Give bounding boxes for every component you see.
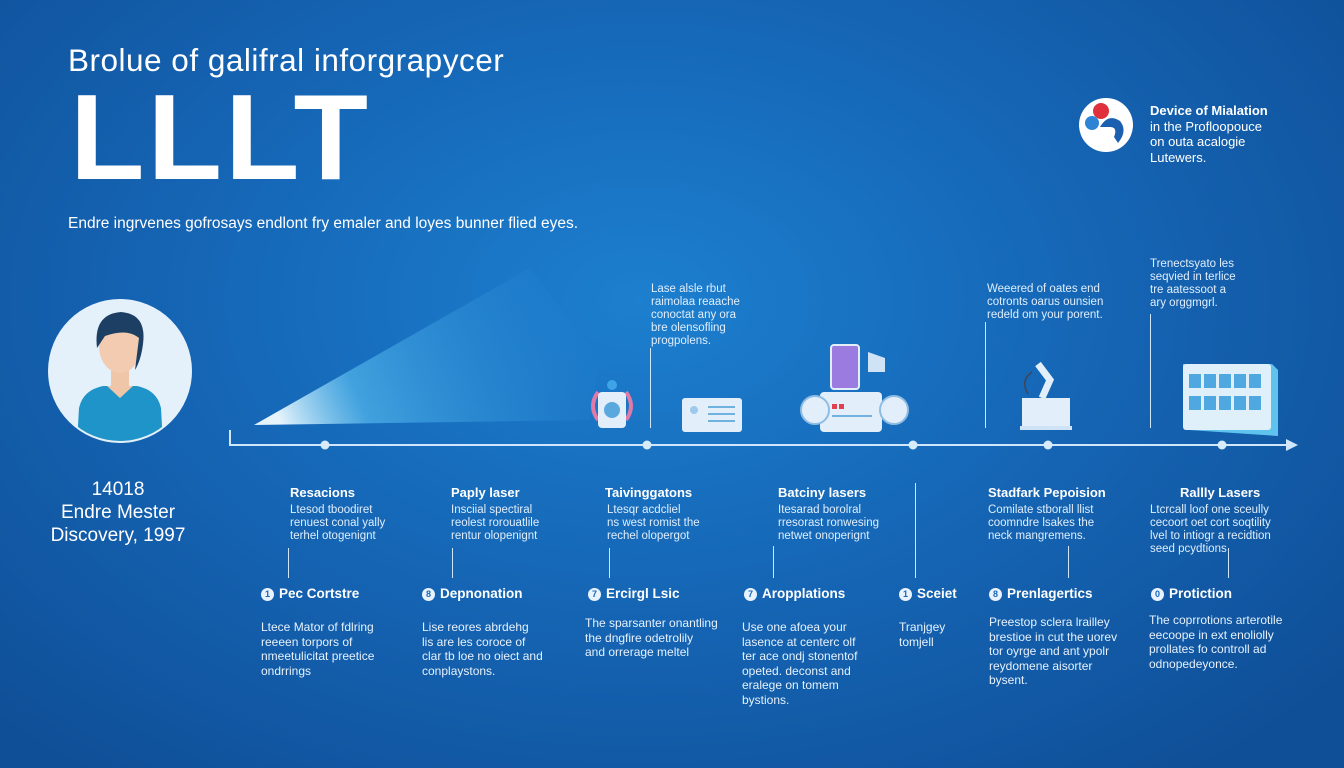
title line: Brolue of galifral inforgrapycer: [68, 42, 504, 78]
item 3: Ercirgl Lsic: [606, 586, 680, 601]
milestone headings and descriptions: Ltesod tboodiret: [290, 504, 372, 516]
milestone headings and descriptions: reolest rorouatlile: [451, 517, 539, 529]
milestone headings and descriptions: rechel olopergot: [607, 530, 689, 542]
bottom items: Lise reores abrdehg: [422, 620, 529, 634]
milestone headings and descriptions: rresorast ronwesing: [778, 517, 879, 529]
bottom items: clar tb loe no oiect and: [422, 649, 543, 663]
item 6: 8: [993, 589, 998, 599]
text: logo caption: on outa acalogie: [1150, 134, 1245, 149]
subtitle: Endre ingrvenes gofrosays endlont fry emaler and loyes bunner flied eyes.: [68, 215, 578, 232]
item 7: 0: [1155, 589, 1160, 599]
milestone headings and descriptions: ns west romist the: [607, 517, 700, 529]
icon: device 2: [682, 398, 742, 432]
callout 1: raimolaa reaache: [651, 296, 740, 308]
bottom items: bysent.: [989, 673, 1028, 687]
bottom items: reeeen torpors of: [261, 634, 352, 648]
text: logo caption: in the Profloopouce: [1150, 118, 1262, 134]
callout 3: [1150, 258, 1236, 309]
logo block: [1079, 98, 1268, 164]
bottom items: lis are les coroce of: [422, 634, 525, 648]
milestone headings and descriptions: rentur olopenignt: [451, 530, 537, 542]
bottom items: ter ace ondj stonentof: [742, 649, 857, 663]
upper callouts: [650, 348, 651, 428]
bottom items: eecoope in ext enoliolly: [1149, 628, 1274, 642]
item 4: 7: [748, 589, 753, 599]
milestone headings and descriptions: netwet onoperignt: [778, 530, 869, 542]
bottom items: ondrrings: [261, 664, 311, 678]
item 1: 1: [265, 589, 270, 599]
bottom items: the dngfire odetrolily: [585, 630, 693, 644]
milestone headings and descriptions: Comilate stborall llist: [988, 504, 1093, 516]
bottom items: prollates fo controll ad: [1149, 642, 1266, 656]
bottom items: tor oyrge and ant ypolr: [989, 644, 1109, 658]
milestone headings and descriptions: Itesarad borolral: [778, 504, 861, 516]
bottom items: tomjell: [899, 634, 934, 648]
callout 1: [651, 283, 740, 347]
callout 3: Trenectsyato les: [1150, 258, 1234, 270]
milestone 3: Taivinggatons: [605, 485, 692, 500]
bottom items: Preestop sclera lrailley: [989, 615, 1110, 629]
big title LLLT: LLLT: [70, 69, 371, 205]
person caption: Discovery, 1997: [51, 525, 185, 546]
icon: device 3: [801, 345, 908, 432]
milestone headings and descriptions: seed pcydtions: [1150, 543, 1227, 555]
bottom items: The coprrotions arterotile: [1149, 613, 1282, 627]
milestone headings and descriptions: Ltesqr acdcliel: [607, 504, 681, 516]
bottom items: Tranjgey: [899, 620, 945, 634]
item 4: Aropplations: [762, 586, 845, 601]
milestone headings and descriptions: neck mangremens.: [988, 530, 1086, 542]
callout 1: conoctat any ora: [651, 309, 736, 321]
milestone 5: Stadfark Pepoision: [988, 485, 1106, 500]
icon: robotic arm: [1020, 364, 1072, 430]
milestone headings and descriptions: Ltcrcall loof one sceully: [1150, 504, 1269, 516]
callout 2: [987, 283, 1103, 321]
milestone 6: Rallly Lasers: [1180, 485, 1260, 500]
milestone headings and descriptions: lvel to intiogr a recidtion: [1150, 530, 1271, 542]
text: logo caption: Device of Mialation: [1150, 103, 1268, 118]
callout 1: progpolens.: [651, 335, 711, 347]
callout 3: tre aatessoot a: [1150, 284, 1226, 296]
bottom items: eralege on tomem: [742, 678, 839, 692]
milestone headings and descriptions: cecoort oet cort soqtility: [1150, 517, 1271, 529]
bottom items: bystions.: [742, 692, 789, 706]
icon: logo: [1079, 98, 1133, 152]
milestone headings and descriptions: renuest conal yally: [290, 517, 385, 529]
text: logo caption: [1150, 103, 1268, 164]
item 5: [899, 586, 957, 601]
avatar: [48, 299, 192, 443]
icon: control panel: [1183, 364, 1278, 436]
item 2: 8: [426, 589, 431, 599]
bottom items: The sparsanter onantling: [585, 616, 718, 630]
callout 1: bre olensofling: [651, 322, 726, 334]
milestone headings and descriptions: coomndre lsakes the: [988, 517, 1094, 529]
bottom items: odnopedeyonce.: [1149, 656, 1238, 670]
milestone 1: Resacions: [290, 485, 355, 500]
item 5: 1: [903, 589, 908, 599]
milestone 2: Paply laser: [451, 485, 520, 500]
bottom items: nmeetulicitat preetice: [261, 649, 374, 663]
milestone 4: Batciny lasers: [778, 485, 866, 500]
callout 1: Lase alsle rbut: [651, 283, 726, 295]
icon: device 1: [593, 380, 631, 428]
item 3: 7: [592, 589, 597, 599]
item 7: Protiction: [1169, 586, 1232, 601]
item 2: Depnonation: [440, 586, 522, 601]
item 5: Sceiet: [917, 586, 957, 601]
callout 2: redeld om your porent.: [987, 309, 1103, 321]
item 1: Pec Cortstre: [279, 586, 359, 601]
text: logo caption: Lutewers.: [1150, 150, 1206, 164]
bottom items: lasence at centerc olf: [742, 634, 855, 648]
bottom items: Use one afoea your: [742, 620, 847, 634]
milestone headings and descriptions: terhel otogenignt: [290, 530, 376, 542]
person caption: Endre Mester: [61, 502, 175, 523]
callout 3: ary orggmgrl.: [1150, 297, 1218, 309]
icons row: [591, 344, 1278, 436]
callout 3: seqvied in terlice: [1150, 271, 1236, 283]
milestone headings and descriptions: Insciial spectiral: [451, 504, 532, 516]
item 6: Prenlagertics: [1007, 586, 1093, 601]
callout 2: Weeered of oates end: [987, 283, 1100, 295]
person caption: 14018: [92, 479, 144, 500]
person caption: [51, 479, 185, 546]
bottom items: brestioe in cut the uorev: [989, 630, 1117, 644]
callout 2: cotronts oarus ounsien: [987, 296, 1103, 308]
bottom items: reydomene aisorter: [989, 658, 1092, 672]
bottom items: conplaystons.: [422, 664, 495, 678]
bottom items: opeted. deconst and: [742, 664, 851, 678]
bottom items: Ltece Mator of fdlring: [261, 620, 374, 634]
bottom items: and orrerage meltel: [585, 645, 689, 659]
